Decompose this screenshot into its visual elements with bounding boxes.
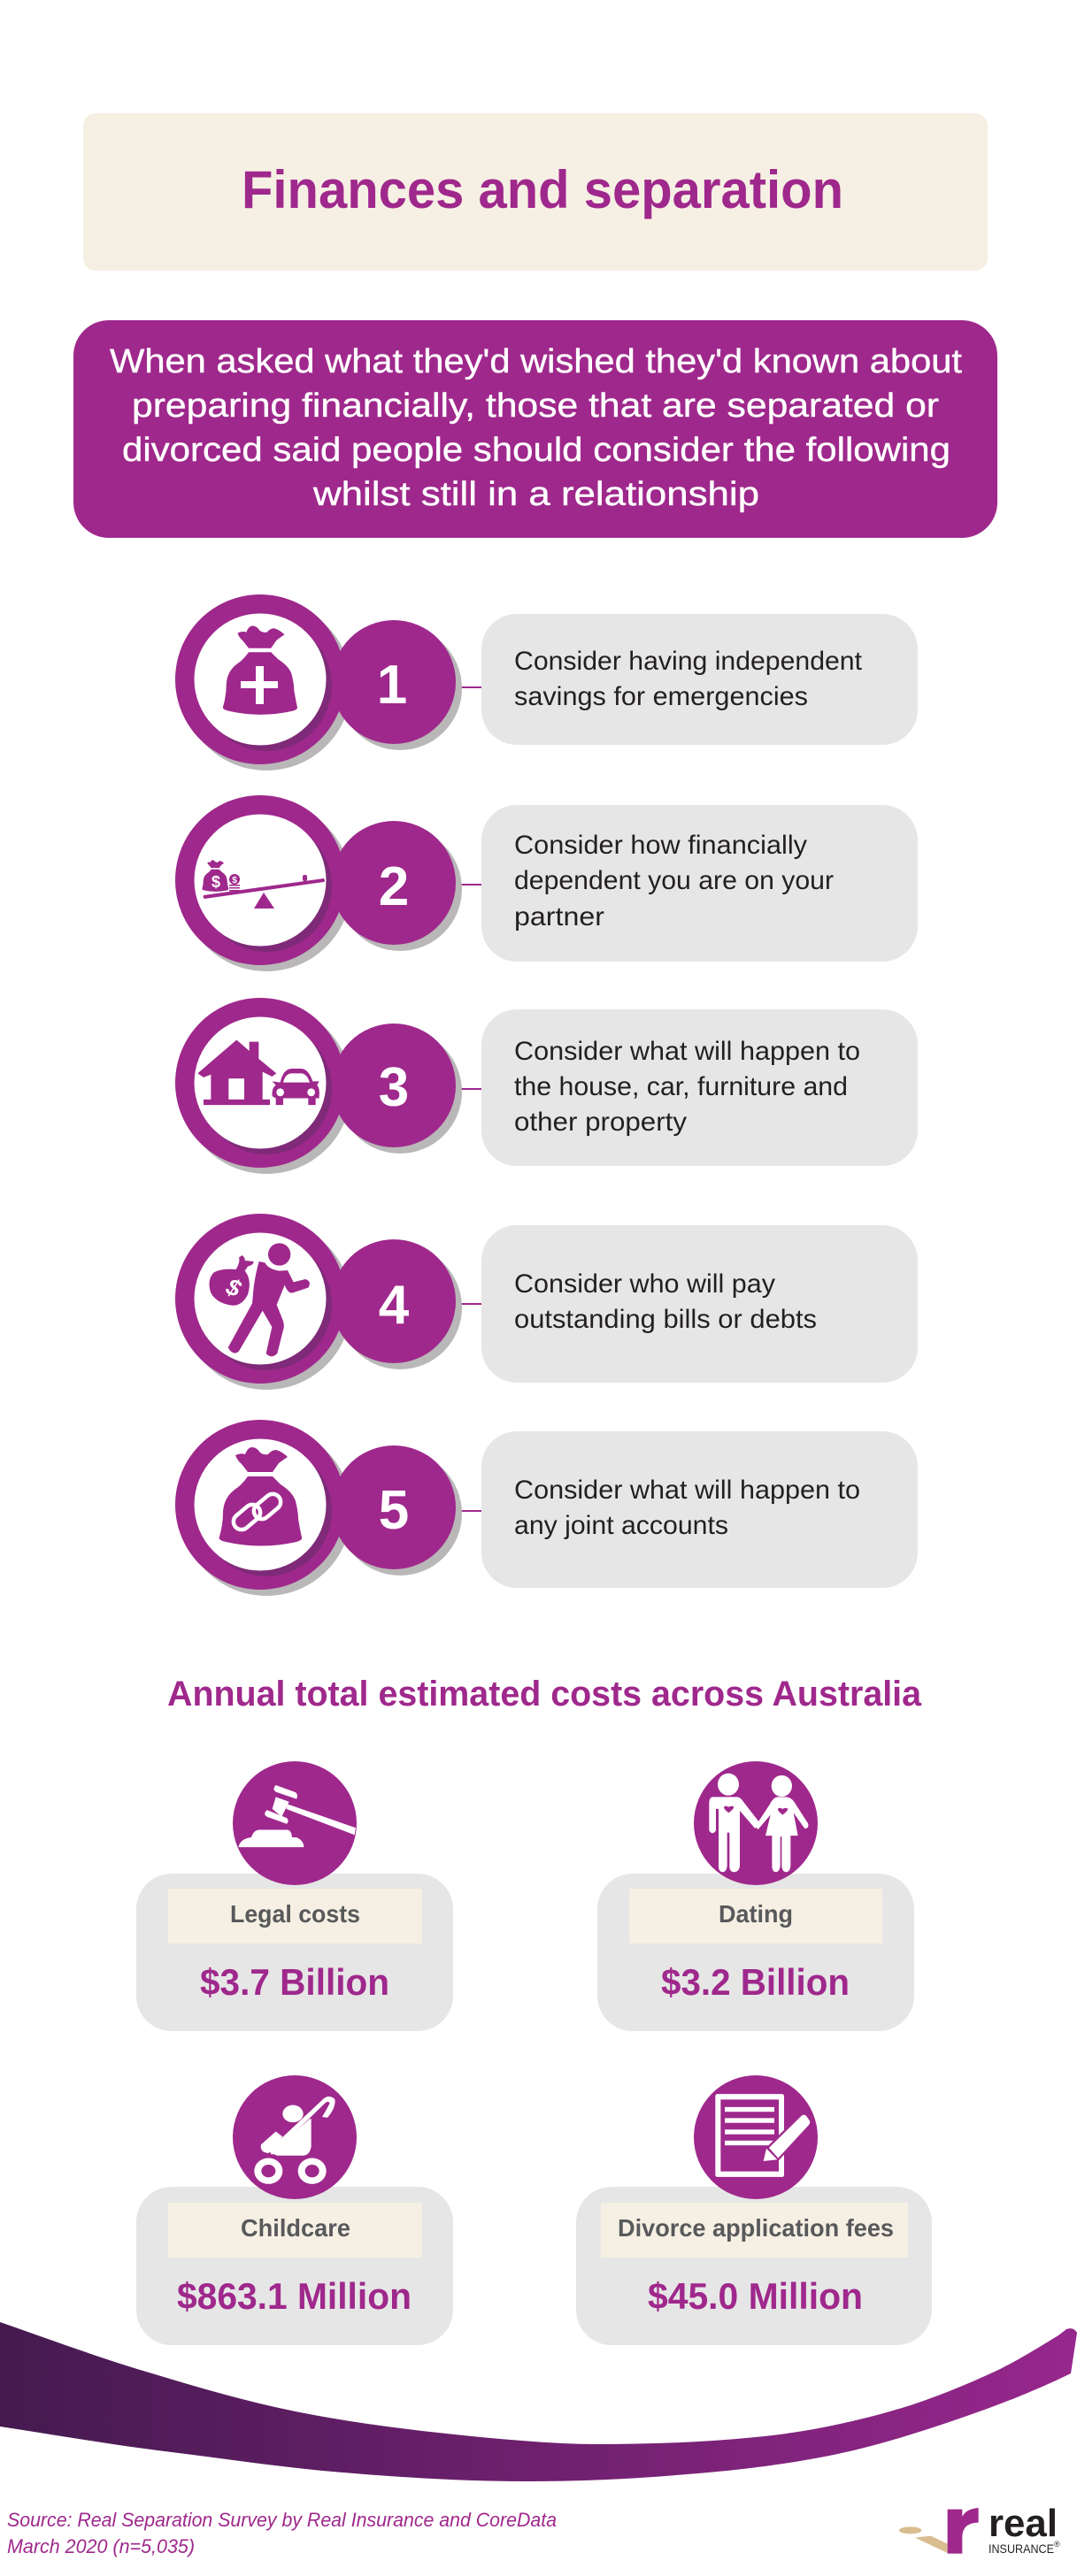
- number badge 3: [332, 1024, 462, 1154]
- panel: legal costs: [136, 1761, 453, 2031]
- text box 4: [481, 1225, 918, 1383]
- number badge 1: [332, 620, 462, 750]
- icon: stroller: [233, 2075, 357, 2199]
- logo: Real Insurance: ®: [1054, 2540, 1060, 2549]
- panel: childcare: Childcare: [241, 2214, 350, 2242]
- panel: intro text: When asked what they'd wished they'd known about: [110, 343, 962, 380]
- step 3: [175, 998, 918, 1174]
- text box 5: any joint accounts: [514, 1511, 728, 1540]
- panel: childcare: $863.1 Million: [177, 2275, 412, 2317]
- number badge 2: 2: [379, 856, 409, 917]
- number badge 5: 5: [379, 1480, 409, 1541]
- source note: March 2020 (n=5,035): [7, 2535, 195, 2557]
- source note: Source: Real Separation Survey by Real Insurance and CoreData: [7, 2509, 557, 2531]
- panel: divorce application fees: $45.0 Million: [648, 2275, 863, 2317]
- step 1: [175, 594, 918, 770]
- logo: Real Insurance: [899, 2502, 1060, 2556]
- text box 2: dependent you are on your: [514, 866, 834, 895]
- text box 5: [481, 1431, 918, 1588]
- text box 2: [481, 805, 918, 962]
- panel: legal costs: $3.7 Billion: [200, 1961, 389, 2003]
- panel: childcare: [136, 2075, 453, 2345]
- icon: document and pen: [694, 2075, 818, 2199]
- text box 3: other property: [514, 1108, 687, 1137]
- logo: Real Insurance: real: [989, 2502, 1058, 2545]
- number badge 5: [332, 1445, 462, 1576]
- number badge 1: 1: [377, 655, 407, 716]
- panel: dating: $3.2 Billion: [661, 1961, 850, 2003]
- swoosh band: [0, 2322, 1077, 2481]
- icon: gavel: [233, 1761, 357, 1885]
- panel: dating: [597, 1761, 914, 2031]
- text box 2: partner: [514, 902, 604, 932]
- number badge 3: 3: [379, 1057, 409, 1118]
- text box 2: Consider how financially: [514, 831, 807, 860]
- icon: money bag with chain links: [175, 1420, 345, 1590]
- panel: intro text: whilst still in a relationship: [312, 476, 759, 513]
- icon: person carrying money bag: [175, 1214, 345, 1384]
- logo: Real Insurance: INSURANCE: [989, 2542, 1054, 2556]
- panel: dating: Dating: [719, 1900, 793, 1928]
- title banner: [83, 113, 988, 271]
- icon: couple holding hands: [694, 1761, 818, 1885]
- icon: house and car: [175, 998, 345, 1168]
- source note: [7, 2509, 557, 2557]
- icon: seesaw with money bag: $: [232, 876, 237, 886]
- text box 1: [481, 614, 918, 745]
- text box 5: Consider what will happen to: [514, 1476, 860, 1505]
- number badge 4: [332, 1239, 462, 1369]
- panel: intro text: [73, 320, 997, 538]
- number badge 2: [332, 821, 462, 951]
- number badge 4: 4: [379, 1275, 410, 1336]
- text box 3: [481, 1009, 918, 1166]
- panel: intro text: divorced said people should consider the following: [122, 432, 950, 469]
- step 5: [175, 1420, 918, 1596]
- panel: intro text: preparing financially, those that are separated or: [132, 387, 939, 425]
- text box 1: savings for emergencies: [514, 682, 808, 711]
- icon: person carrying money bag: $: [222, 1273, 246, 1303]
- title: Finances and separation: [242, 160, 843, 219]
- step 4: [175, 1214, 918, 1390]
- section heading: Annual total estimated costs across Australia: [167, 1675, 922, 1714]
- text box 3: the house, car, furniture and: [514, 1072, 848, 1101]
- step 2: [175, 795, 918, 971]
- panel: divorce application fees: [576, 2075, 932, 2345]
- text box 3: Consider what will happen to: [514, 1037, 860, 1066]
- text box 4: Consider who will pay: [514, 1269, 775, 1299]
- icon: seesaw with money bag: $: [212, 873, 220, 891]
- panel: divorce application fees: Divorce application fees: [618, 2214, 894, 2242]
- icon: money bag with plus: [175, 594, 345, 764]
- panel: legal costs: Legal costs: [230, 1900, 360, 1928]
- text box 4: outstanding bills or debts: [514, 1305, 817, 1334]
- text box 1: Consider having independent: [514, 647, 863, 676]
- icon: seesaw with money bag: [175, 795, 345, 965]
